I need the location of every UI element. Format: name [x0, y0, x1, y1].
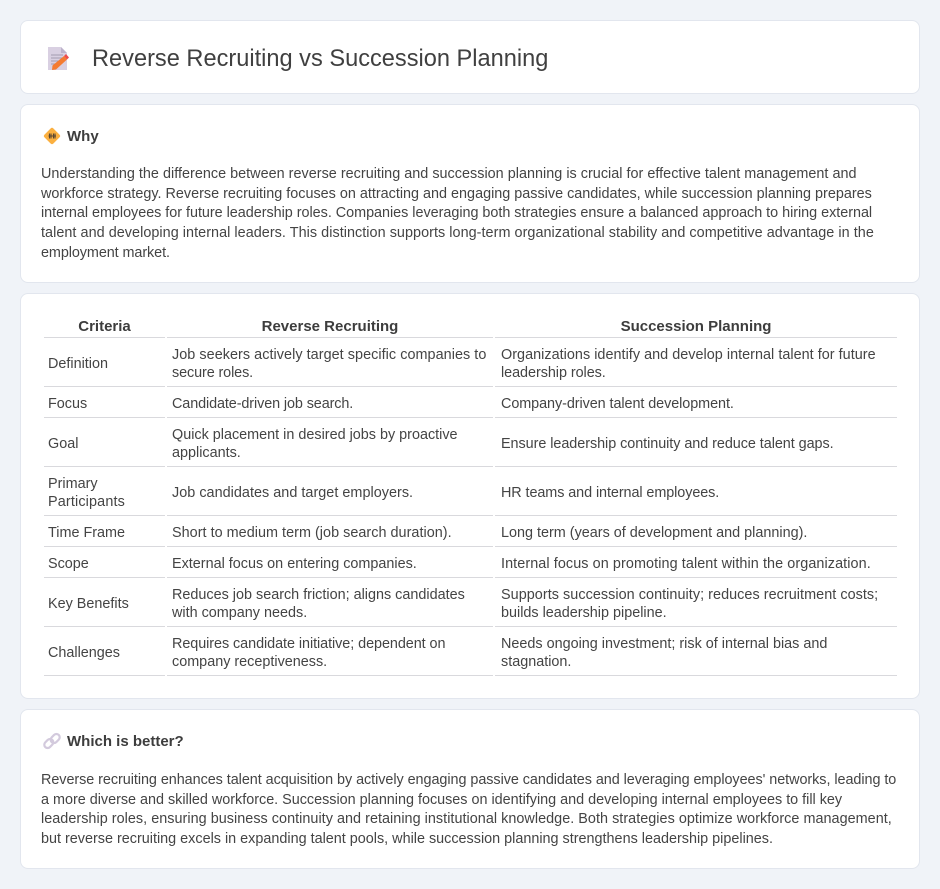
row: definition: Organizations identify and develop internal talent for future: [501, 347, 876, 363]
row: scope: Scope: [48, 556, 89, 572]
row: definition: leadership roles.: [501, 365, 606, 381]
row: primary participants: [48, 476, 719, 510]
row: primary participants: HR teams and internal employees.: [501, 485, 719, 501]
row: focus: [48, 396, 734, 412]
row: key benefits: with company needs.: [172, 605, 307, 621]
row: challenges: Challenges: [48, 645, 120, 661]
row: time frame: Long term (years of development and planning).: [501, 525, 807, 541]
row: goal: [48, 427, 834, 461]
icon: diamond sign: [44, 128, 60, 144]
row: challenges: Needs ongoing investment; risk of internal bias and: [501, 636, 827, 652]
row: definition: secure roles.: [172, 365, 253, 381]
table header: criteria: Criteria: [78, 318, 131, 335]
icon: chain link: [43, 732, 61, 750]
row: primary participants: Job candidates and target employers.: [172, 485, 413, 501]
panel: comparison table: [20, 293, 920, 699]
row: primary participants: Primary: [48, 476, 98, 492]
panel: why: [20, 104, 920, 283]
which is better text: a more diverse and skilled workforce. Succession planning focuses on identifying and developing internal employees to fill key: [41, 792, 842, 808]
why text: [41, 166, 874, 261]
row: challenges: Requires candidate initiative; dependent on: [172, 636, 445, 652]
row: primary participants: Participants: [48, 494, 125, 510]
row: key benefits: builds leadership pipeline.: [501, 605, 667, 621]
row: scope: External focus on entering companies.: [172, 556, 417, 572]
row: goal: Quick placement in desired jobs by proactive: [172, 427, 458, 443]
row: challenges: stagnation.: [501, 654, 571, 670]
row: goal: Ensure leadership continuity and reduce talent gaps.: [501, 436, 834, 452]
why text: talent and developing internal leaders. This distinction supports long-term organizational stability and competitive advantage in the: [41, 225, 874, 241]
row: definition: Job seekers actively target specific companies to: [172, 347, 486, 363]
why text: Understanding the difference between reverse recruiting and succession planning is crucial for effective talent management and: [41, 166, 857, 182]
row: time frame: Short to medium term (job search duration).: [172, 525, 452, 541]
row: key benefits: Key Benefits: [48, 596, 129, 612]
header panel: [20, 20, 920, 94]
row: focus: Focus: [48, 396, 87, 412]
heading: why: Why: [67, 128, 99, 145]
row: scope: [48, 556, 871, 572]
row: focus: Candidate-driven job search.: [172, 396, 353, 412]
table header: reverse recruiting: Reverse Recruiting: [262, 318, 398, 335]
row: definition: Definition: [48, 356, 108, 372]
row: scope: Internal focus on promoting talent within the organization.: [501, 556, 871, 572]
which is better text: leadership roles, ensuring business continuity and retaining institutional knowledge. Both strategies optimize workforce management,: [41, 811, 892, 827]
which is better text: but reverse recruiting excels in expanding talent pools, while succession planning strengthens leadership pipelines.: [41, 831, 773, 847]
heading: which is better: Which is better?: [67, 733, 184, 750]
why text: workforce strategy. Reverse recruiting focuses on attracting and engaging passive candidates, while succession planning prepares: [41, 186, 872, 202]
why text: employment market.: [41, 245, 170, 261]
why text: internal employees for future leadership roles. Companies leveraging both strategies ensure a balanced approach to hiring external: [41, 205, 872, 221]
row: goal: Goal: [48, 436, 78, 452]
row: time frame: Time Frame: [48, 525, 125, 541]
row: key benefits: Reduces job search friction; aligns candidates: [172, 587, 465, 603]
table header: succession planning: Succession Planning: [621, 318, 771, 335]
title: Reverse Recruiting vs Succession Planning: [92, 46, 548, 72]
row: challenges: company receptiveness.: [172, 654, 327, 670]
which is better text: Reverse recruiting enhances talent acquisition by actively engaging passive candidates and leveraging employees' networks, leading to: [41, 772, 896, 788]
row: key benefits: Supports succession continuity; reduces recruitment costs;: [501, 587, 878, 603]
row: challenges: [48, 636, 827, 670]
row: key benefits: [48, 587, 878, 621]
row: focus: Company-driven talent development.: [501, 396, 734, 412]
row: time frame: [48, 525, 807, 541]
row: goal: applicants.: [172, 445, 241, 461]
row: definition: [48, 347, 876, 381]
which is better text: [41, 772, 896, 847]
icon: document with pencil: [48, 47, 69, 70]
panel: which is better: [20, 709, 920, 869]
